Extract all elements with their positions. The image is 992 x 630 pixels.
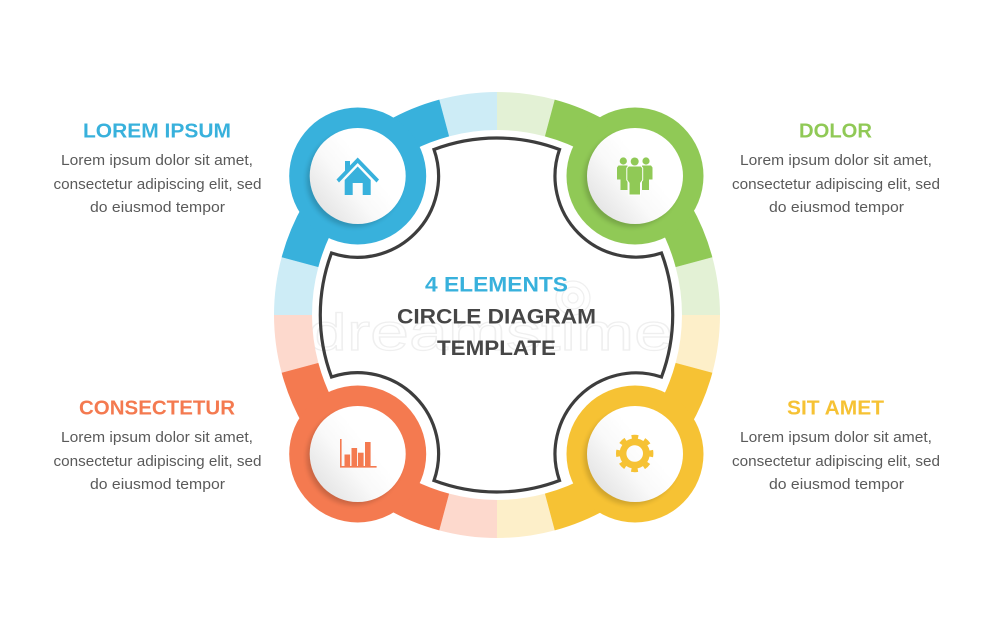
ring: light segments <box>293 111 701 519</box>
text block: sit amet <box>732 398 940 493</box>
text block: consectetur <box>54 398 262 493</box>
icon: bar chart <box>340 439 377 468</box>
icon: gear <box>615 434 654 473</box>
text block: consectetur: do eiusmod tempor <box>90 477 225 493</box>
text block: consectetur: CONSECTETUR <box>79 398 236 420</box>
text block: sit amet: consectetur adipiscing elit, sed <box>732 454 940 470</box>
text block: sit amet: SIT AMET <box>787 398 884 420</box>
watermark <box>308 281 673 362</box>
text block: dolor: Lorem ipsum dolor sit amet, <box>740 153 932 169</box>
text block: lorem ipsum <box>54 120 262 216</box>
text block: dolor: consectetur adipiscing elit, sed <box>732 177 940 193</box>
text block: lorem ipsum: Lorem ipsum dolor sit amet, <box>61 153 253 169</box>
text block: lorem ipsum: consectetur adipiscing elit, sed <box>54 177 262 193</box>
text block: sit amet: Lorem ipsum dolor sit amet, <box>740 430 932 446</box>
white disc: orange <box>310 406 406 502</box>
center title: 4 ELEMENTS <box>425 274 568 296</box>
text block: consectetur: consectetur adipiscing elit, sed <box>54 454 262 470</box>
segment: orange <box>289 368 444 522</box>
center title: TEMPLATE <box>437 337 556 360</box>
segment: yellow <box>550 368 704 522</box>
icon: house <box>336 158 379 195</box>
text block: dolor: do eiusmod tempor <box>769 200 904 216</box>
text block: lorem ipsum: LOREM IPSUM <box>83 120 231 142</box>
white disc: green <box>587 128 683 224</box>
icon: people <box>617 157 652 195</box>
center outline <box>320 138 673 492</box>
text block: dolor <box>732 120 940 216</box>
text block: dolor: DOLOR <box>799 120 873 142</box>
text block: consectetur: Lorem ipsum dolor sit amet, <box>61 430 253 446</box>
segment: blue <box>289 108 444 262</box>
watermark: dreamstime <box>308 304 673 362</box>
text block: lorem ipsum: do eiusmod tempor <box>90 200 225 216</box>
white disc: blue <box>310 128 406 224</box>
segment: green <box>550 108 704 262</box>
white disc: yellow <box>587 406 683 502</box>
text block: sit amet: do eiusmod tempor <box>769 477 904 493</box>
center title <box>397 274 596 360</box>
center title: CIRCLE DIAGRAM <box>397 306 596 328</box>
